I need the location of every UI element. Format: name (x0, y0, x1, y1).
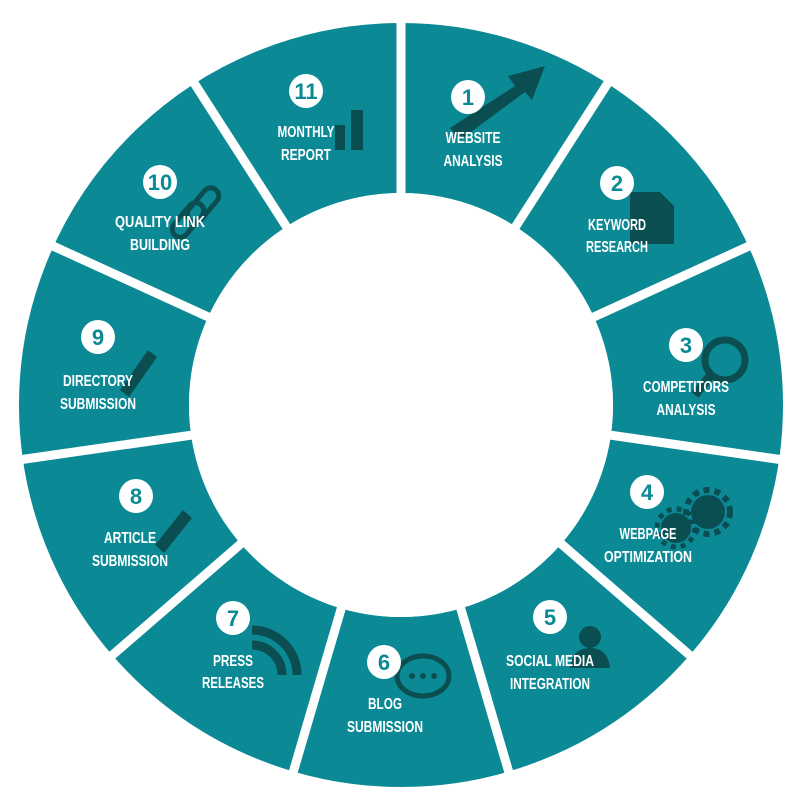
icon: document (630, 192, 674, 244)
segment 2: keyword research: RESEARCH (586, 239, 648, 256)
segment 9: directory submission: DIRECTORY (63, 373, 133, 390)
segment 8: article submission: ARTICLE (104, 530, 156, 547)
segment 2: keyword research: 2 (611, 171, 623, 196)
segment 1: website analysis: ANALYSIS (444, 153, 503, 170)
segment 8: article submission: 8 (130, 484, 142, 509)
segment 10: quality link building (115, 165, 222, 254)
segment 7: press releases: PRESS (213, 653, 253, 670)
segment 3: competitors analysis: 3 (680, 333, 692, 358)
icon: pencil (155, 510, 192, 553)
segment 10: quality link building: 10 (148, 170, 172, 195)
icon: paperclip (169, 200, 207, 240)
segment 3: competitors analysis: ANALYSIS (656, 402, 716, 419)
segment 6: blog submission: BLOG (368, 696, 402, 713)
icon: speech bubble (397, 656, 449, 696)
segment 10: quality link building: QUALITY LINK (115, 214, 205, 231)
segment 1: website analysis: WEBSITE (446, 130, 501, 147)
segment 2: keyword research: KEYWORD (588, 217, 646, 234)
icon: magnifier (705, 340, 745, 380)
icon: pencil (120, 350, 157, 397)
segment 11: monthly report: 11 (294, 79, 318, 104)
segment 2: keyword research (586, 166, 674, 256)
segment 9: directory submission: 9 (92, 325, 104, 350)
segment 11: monthly report: MONTHLY (278, 124, 335, 141)
segment 11: monthly report (278, 74, 363, 164)
segment 5: social media integration: SOCIAL MEDIA (506, 653, 594, 670)
segment 10: quality link building: BUILDING (130, 237, 190, 254)
icon: person (579, 626, 601, 648)
icon: gears (691, 495, 725, 529)
segment 4: webpage optimization: OPTIMIZATION (604, 549, 692, 566)
segment 8: article submission (92, 479, 192, 570)
segment 5: social media integration: 5 (544, 605, 556, 630)
segment 6: blog submission: SUBMISSION (347, 719, 423, 736)
segment 11: monthly report: REPORT (281, 147, 331, 164)
segment 8: article submission: SUBMISSION (92, 553, 168, 570)
segment 4: webpage optimization (604, 475, 730, 566)
segment 9: directory submission (60, 320, 157, 413)
segment 5: social media integration (506, 600, 610, 693)
segment 5: social media integration: INTEGRATION (510, 676, 590, 693)
segment 7: press releases: 7 (227, 606, 239, 631)
segment 3: competitors analysis (643, 328, 745, 419)
segment 1: website analysis: 1 (462, 85, 474, 110)
icon: rss (252, 630, 297, 675)
icon: bars (335, 125, 345, 150)
icon: arrow (450, 66, 545, 140)
segment 6: blog submission: 6 (378, 650, 390, 675)
segment 7: press releases (202, 601, 297, 692)
segment 4: webpage optimization: 4 (641, 480, 654, 505)
segment 1: website analysis (444, 66, 545, 170)
segment 6: blog submission (347, 645, 449, 736)
segment 7: press releases: RELEASES (202, 675, 264, 692)
segment 4: webpage optimization: WEBPAGE (620, 526, 677, 543)
segment 3: competitors analysis: COMPETITORS (643, 379, 729, 396)
segment 9: directory submission: SUBMISSION (60, 396, 136, 413)
